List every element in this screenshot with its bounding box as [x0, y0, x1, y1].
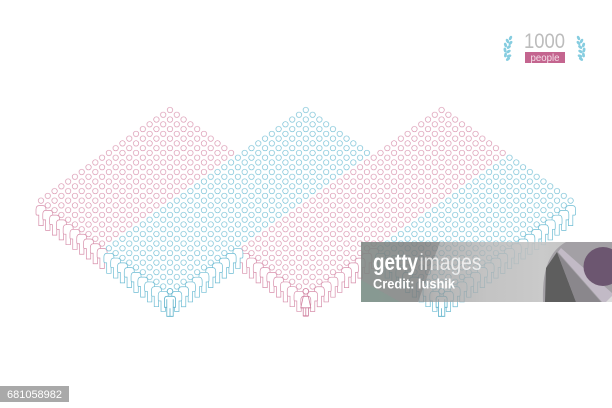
image id tag: 681058982 [7, 389, 62, 401]
band 1: pink heads [34, 105, 238, 248]
figure: blue person, third corner [436, 288, 447, 316]
figure: blue person, first corner [164, 288, 176, 316]
people bodies: front edges of the crowd [36, 206, 576, 316]
watermark banner [361, 242, 612, 302]
icon: left laurel [503, 35, 513, 62]
legend badge: people [530, 53, 560, 64]
band 4: blue heads [374, 153, 577, 296]
watermark logo: getty [373, 249, 418, 275]
watermark logo [373, 249, 482, 275]
figure: pink person, second corner [301, 288, 311, 316]
band 2: blue heads [102, 105, 374, 296]
watermark credit: Credit: lushik [373, 277, 455, 292]
legend number: 1000 [524, 30, 565, 53]
icon: right laurel [576, 35, 586, 62]
watermark logo: images [420, 249, 482, 275]
image id tag [0, 386, 69, 402]
band 3: pink heads [238, 105, 510, 296]
legend: 1000 people [503, 30, 586, 64]
